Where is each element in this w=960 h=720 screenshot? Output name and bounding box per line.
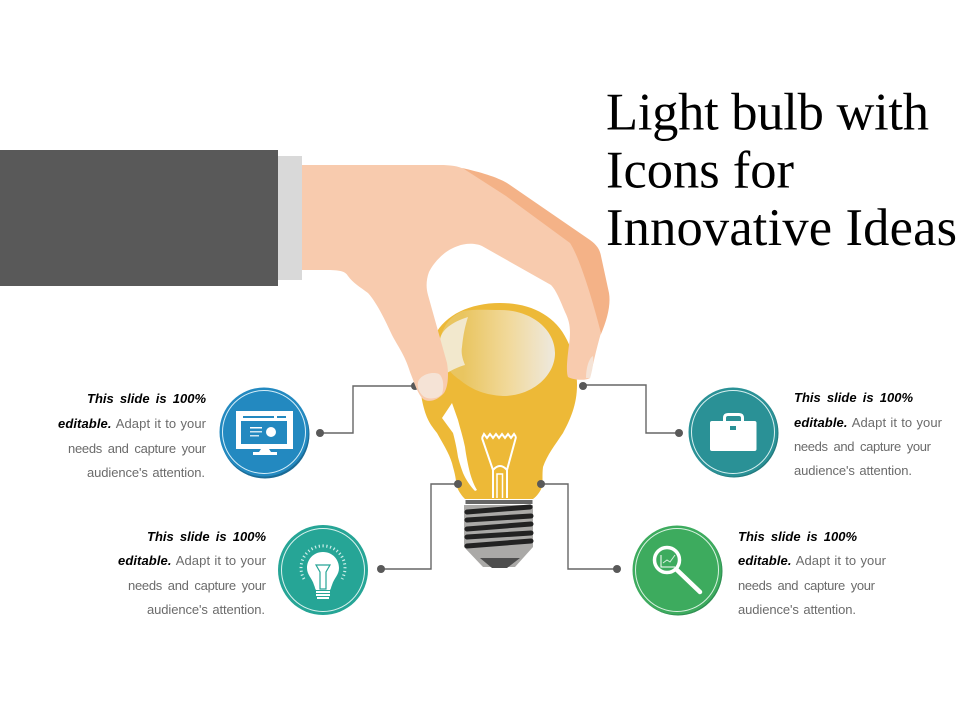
icon: briefcase badge [688,388,778,478]
title: Light bulb with [606,84,929,142]
text block: bottom left [118,529,267,617]
text block: top left: audience's attention. [87,465,205,480]
connector lines [320,385,679,569]
text block: bottom left: needs and capture your [128,578,267,593]
glass reflection left [440,317,468,373]
text block: top left: needs and capture your [68,441,207,456]
text block: top right: audience's attention. [794,463,912,478]
white glare [442,403,477,491]
hand shadow edge [462,168,610,345]
text block: bottom right: editable. Adapt it to your [738,553,887,568]
text block: top left: This slide is 100% [87,391,206,406]
monitor icon [236,411,293,455]
briefcase icon [710,414,756,451]
text block: bottom right: audience's attention. [738,602,856,617]
hand body [302,165,601,401]
light bulb [421,303,577,568]
text block: bottom right: This slide is 100% [738,529,857,544]
title: Innovative Ideas [606,199,957,257]
sleeve [0,150,278,286]
text block: bottom left: editable. Adapt it to your [118,553,267,568]
bulb icon [301,546,345,599]
text block: bottom right: needs and capture your [738,578,876,593]
finger nail [586,356,593,378]
text block: bottom right [738,529,887,617]
text block: top right: editable. Adapt it to your [794,415,943,430]
title: Icons for [606,142,795,200]
connector dots [316,382,683,573]
icon: magnifier badge [632,526,722,616]
text block: top left [58,391,207,480]
text block: top left: editable. Adapt it to your [58,416,207,431]
text block: bottom left: This slide is 100% [147,529,266,544]
filament [482,434,516,498]
text block: top right: needs and capture your [794,439,932,454]
icon: bulb badge [278,525,368,615]
text block: top right [794,390,943,478]
text block: bottom left: audience's attention. [147,602,265,617]
bulb glass [421,303,577,499]
icon: monitor badge [220,388,310,478]
hand [302,165,610,401]
title [606,84,957,257]
text block: top right: This slide is 100% [794,390,913,405]
thumb nail [418,373,443,398]
cuff [278,156,302,280]
socket [464,499,533,568]
magnifier icon [654,548,700,592]
glass reflection [440,310,555,396]
